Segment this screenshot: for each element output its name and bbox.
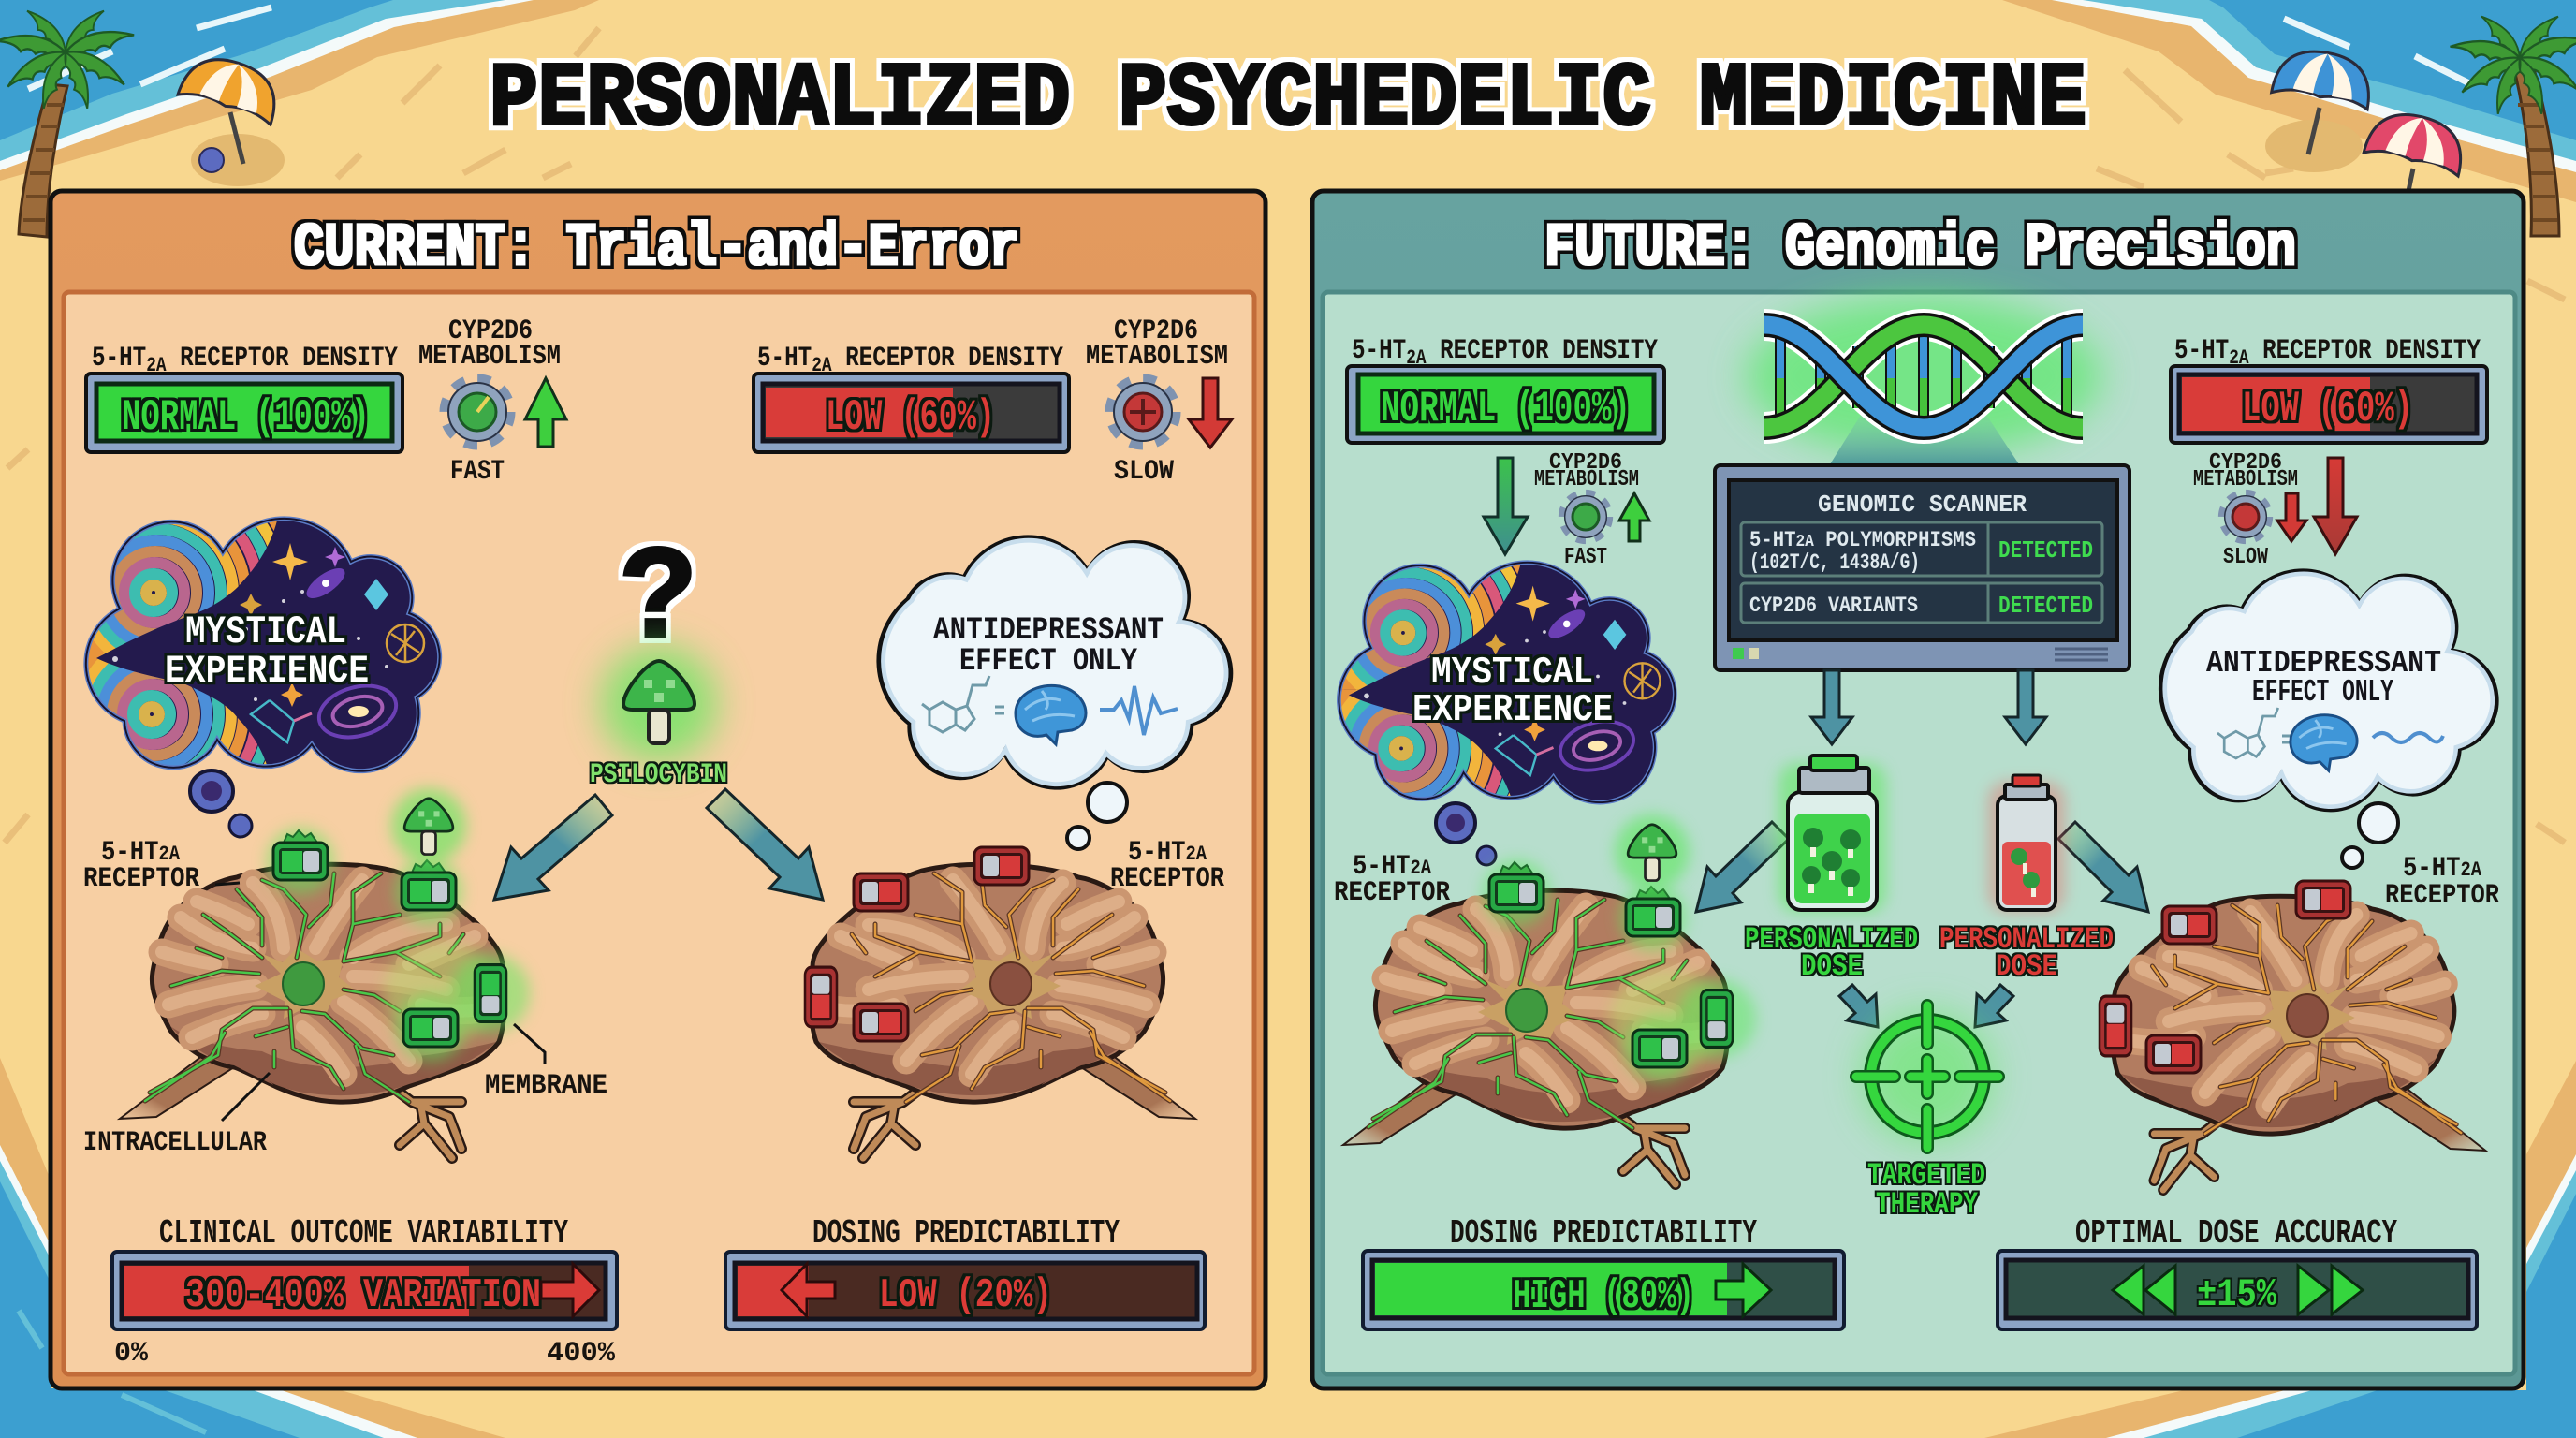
metabolism: slow future: METABOLISM: [2193, 467, 2298, 492]
label: intracellular: [83, 1073, 270, 1159]
label: membrane: MEMBRANE: [485, 1070, 607, 1102]
arrow: density to antidepressant: [2314, 458, 2357, 554]
icon: green vial: [1778, 756, 1886, 913]
label: targeted therapy: THERAPY: [1876, 1187, 1979, 1222]
metabolism: slow: CYP2D6: [1114, 315, 1198, 347]
panel body: future: [1323, 292, 2515, 1374]
brain: inactive receptors future: [2100, 881, 2485, 1190]
metabolism: slow future: [2193, 450, 2306, 570]
title: PERSONALIZED PSYCHEDELIC MEDICINE: [490, 49, 2086, 151]
label: 5-HT2A receptor right future: 5-HT2A: [2403, 853, 2482, 885]
axis labels: 0% and 400%: 0%: [114, 1338, 149, 1370]
label: 5-HT2A receptor right: RECEPTOR: [1110, 863, 1224, 895]
label: targeted therapy: TARGETED: [1867, 1158, 1985, 1193]
label: receptor density, low future: 5-HT: [2174, 335, 2242, 367]
thought cloud: mystical experience future: [1269, 487, 1687, 894]
umbrella: red: [2364, 105, 2470, 191]
metabolism: fast: [418, 315, 566, 488]
metabolism: fast future: FAST: [1564, 545, 1607, 570]
thought cloud: mystical experience future: EXPERIENCE: [1412, 689, 1613, 732]
bar: low 60%: LOW (60%): [826, 393, 995, 442]
label: receptor density, normal future: RECEPTOR DENSITY: [1427, 335, 1658, 367]
arrow: to left brain: [494, 795, 612, 900]
label: personalized dose green: DOSE: [1801, 949, 1863, 984]
genomic scanner monitor: DETECTED: [1998, 592, 2093, 620]
label: 5-HT2A receptor right: 5-HT2A: [1128, 837, 1208, 869]
genomic scanner monitor: CYP2D6 VARIANTS: [1749, 594, 1918, 618]
bar: low 20%: [725, 1252, 1205, 1329]
bar: high 80%: [1363, 1251, 1844, 1329]
panel: future: [1269, 191, 2524, 1388]
bar: normal 100%: NORMAL (100%): [122, 393, 370, 442]
label: membrane: [485, 1024, 607, 1102]
label: 5-HT2A receptor left: 5-HT2A: [101, 837, 181, 869]
umbrella: orange with bag: [178, 49, 285, 186]
genomic scanner monitor: 5-HT2A POLYMORPHISMS: [1749, 528, 1976, 552]
palm tree: left: [0, 3, 135, 237]
icon: small mushroom: [391, 788, 466, 863]
axis labels: 0% and 400%: [114, 1338, 616, 1370]
panel frame: current: [51, 191, 1266, 1388]
metabolism: fast: METABOLISM: [418, 341, 561, 373]
receptors: active: [267, 828, 530, 1062]
label: personalized dose green: PERSONALIZED: [1745, 922, 1918, 957]
icon: DNA helix: [1746, 297, 2101, 464]
metabolism: slow future: SLOW: [2223, 545, 2268, 570]
label: personalized dose red: PERSONALIZED: [1939, 922, 2114, 957]
label: 5-HT2A receptor left future: 5-HT2A: [1353, 851, 1432, 883]
label: 5-HT2A receptor right future: RECEPTOR: [2385, 880, 2499, 912]
label: optimal dose accuracy: OPTIMAL DOSE ACCURACY: [2075, 1214, 2397, 1253]
thought cloud: antidepressant effect only future: ANTIDEPRESSANT: [2206, 646, 2441, 681]
bar: normal 100% future: NORMAL (100%): [1381, 385, 1631, 433]
metabolism: slow: [1086, 315, 1232, 488]
metabolism: fast future: CYP2D6: [1549, 450, 1622, 476]
bar: plus minus 15%: ±15%: [2197, 1272, 2277, 1317]
thought cloud: antidepressant effect only: ANTIDEPRESSANT: [933, 613, 1164, 649]
brain: active receptors: [120, 788, 530, 1158]
question mark: ?: [619, 521, 697, 664]
label: dosing predictability current: DOSING PREDICTABILITY: [812, 1214, 1120, 1253]
metabolism: fast: FAST: [450, 456, 505, 488]
label: 5-HT2A receptor left: [83, 837, 240, 895]
heading: future: FUTURE: Genomic Precision: [1544, 215, 2296, 283]
label: receptor density, low future: 2A: [2229, 346, 2249, 370]
thought cloud: mystical experience: [13, 439, 452, 868]
bar: low 60% future: LOW (60%): [2242, 385, 2413, 433]
bar: normal 100% future: [1347, 366, 1664, 443]
thought cloud: mystical experience: MYSTICAL: [185, 609, 346, 654]
label: receptor density, low: RECEPTOR DENSITY: [832, 343, 1063, 374]
label: receptor density, normal: 5-HT: [92, 343, 159, 374]
bar: low 20%: LOW (20%): [879, 1272, 1052, 1319]
label: psilocybin: PSILOCYBIN: [590, 759, 727, 791]
icon: psilocybin mushroom: [601, 646, 717, 762]
thought cloud: mystical experience: EXPERIENCE: [165, 649, 369, 694]
arrow: red vial to right brain: [2058, 822, 2148, 912]
label: receptor density, normal: 2A: [146, 354, 167, 377]
bar: 300-400% variation: 300-400% VARIATION: [185, 1272, 541, 1319]
metabolism: fast future: METABOLISM: [1534, 467, 1639, 492]
label: receptor density, low: 5-HT: [757, 343, 825, 374]
icon: red vial: [1988, 775, 2065, 913]
label: clinical outcome variability: CLINICAL OUTCOME VARIABILITY: [159, 1214, 568, 1253]
label: intracellular: INTRACELLULAR: [83, 1127, 267, 1159]
bar: low 60%: [754, 374, 1069, 452]
icon: small mushroom future: [1615, 814, 1690, 889]
label: personalized dose red: DOSE: [1996, 949, 2057, 984]
genomic scanner monitor: (102T/C, 1438A/G): [1749, 550, 1920, 575]
label: personalized dose green: [1745, 922, 1918, 984]
label: receptor density, normal future: 2A: [1406, 346, 1427, 370]
arrow: green dose to target: [1839, 985, 1878, 1027]
label: 5-HT2A receptor left: RECEPTOR: [83, 863, 199, 895]
umbrella: blue: [2265, 44, 2376, 172]
heading: current: CURRENT: Trial-and-Error: [294, 215, 1019, 283]
label: 5-HT2A receptor right future: [2385, 853, 2499, 912]
bar: high 80%: HIGH (80%): [1513, 1273, 1694, 1320]
arrow: red dose to target: [1975, 985, 2013, 1027]
thought cloud: mystical experience future: MYSTICAL: [1431, 652, 1593, 695]
genomic scanner monitor: GENOMIC SCANNER: [1818, 491, 2027, 519]
bar: low 60% future: [2171, 366, 2487, 443]
thought cloud: antidepressant effect only: EFFECT ONLY: [959, 644, 1138, 680]
label: 5-HT2A receptor right: [1110, 837, 1224, 895]
label: receptor density, low: 2A: [812, 354, 832, 377]
receptors: active future: [1483, 859, 1756, 1082]
bar: 300-400% variation: [112, 1252, 617, 1329]
label: receptor density, normal: RECEPTOR DENSITY: [167, 343, 398, 374]
label: dosing predictability future: DOSING PREDICTABILITY: [1450, 1214, 1757, 1253]
receptors: inactive: [805, 847, 1029, 1041]
metabolism: slow future: CYP2D6: [2209, 450, 2282, 476]
arrow: to right brain: [707, 789, 823, 900]
brain: inactive receptors: [805, 847, 1195, 1158]
panel frame: future: [1312, 191, 2524, 1388]
receptors: inactive future: [2100, 881, 2350, 1073]
arrow: green vial to left brain: [1696, 822, 1789, 912]
arrow: density to mystical: [1484, 458, 1528, 554]
label: 5-HT2A receptor left future: RECEPTOR: [1334, 877, 1450, 909]
label: receptor density, normal future: 5-HT: [1352, 335, 1419, 367]
axis labels: 0% and 400%: 400%: [547, 1338, 616, 1370]
panel body: current: [64, 292, 1254, 1374]
label: 5-HT2A receptor left future: [1334, 851, 1450, 909]
metabolism: fast: CYP2D6: [448, 315, 533, 347]
genomic scanner monitor: DETECTED: [1998, 536, 2093, 565]
thought cloud: antidepressant effect only future: EFFECT ONLY: [2252, 675, 2393, 710]
brain: active receptors future: [1343, 814, 1756, 1184]
metabolism: slow: SLOW: [1114, 456, 1174, 488]
label: personalized dose red: [1939, 922, 2114, 984]
arrow: scanner to green vial: [1811, 670, 1852, 744]
label: receptor density, low future: RECEPTOR DENSITY: [2249, 335, 2481, 367]
genomic scanner monitor: [1715, 465, 2130, 670]
label: targeted therapy: [1867, 1158, 1985, 1222]
thought cloud: antidepressant effect only: [879, 537, 1231, 849]
icon: target crosshair: [1856, 1005, 1998, 1148]
bar: plus minus 15%: [1998, 1251, 2477, 1329]
palm tree: right: [2450, 8, 2576, 236]
arrow: scanner to red vial: [2005, 670, 2046, 744]
panel: current: [13, 191, 1266, 1388]
bar: normal 100%: [86, 374, 402, 452]
thought cloud: antidepressant effect only future: [2160, 571, 2496, 868]
metabolism: fast future: [1534, 450, 1649, 570]
metabolism: slow: METABOLISM: [1086, 341, 1228, 373]
